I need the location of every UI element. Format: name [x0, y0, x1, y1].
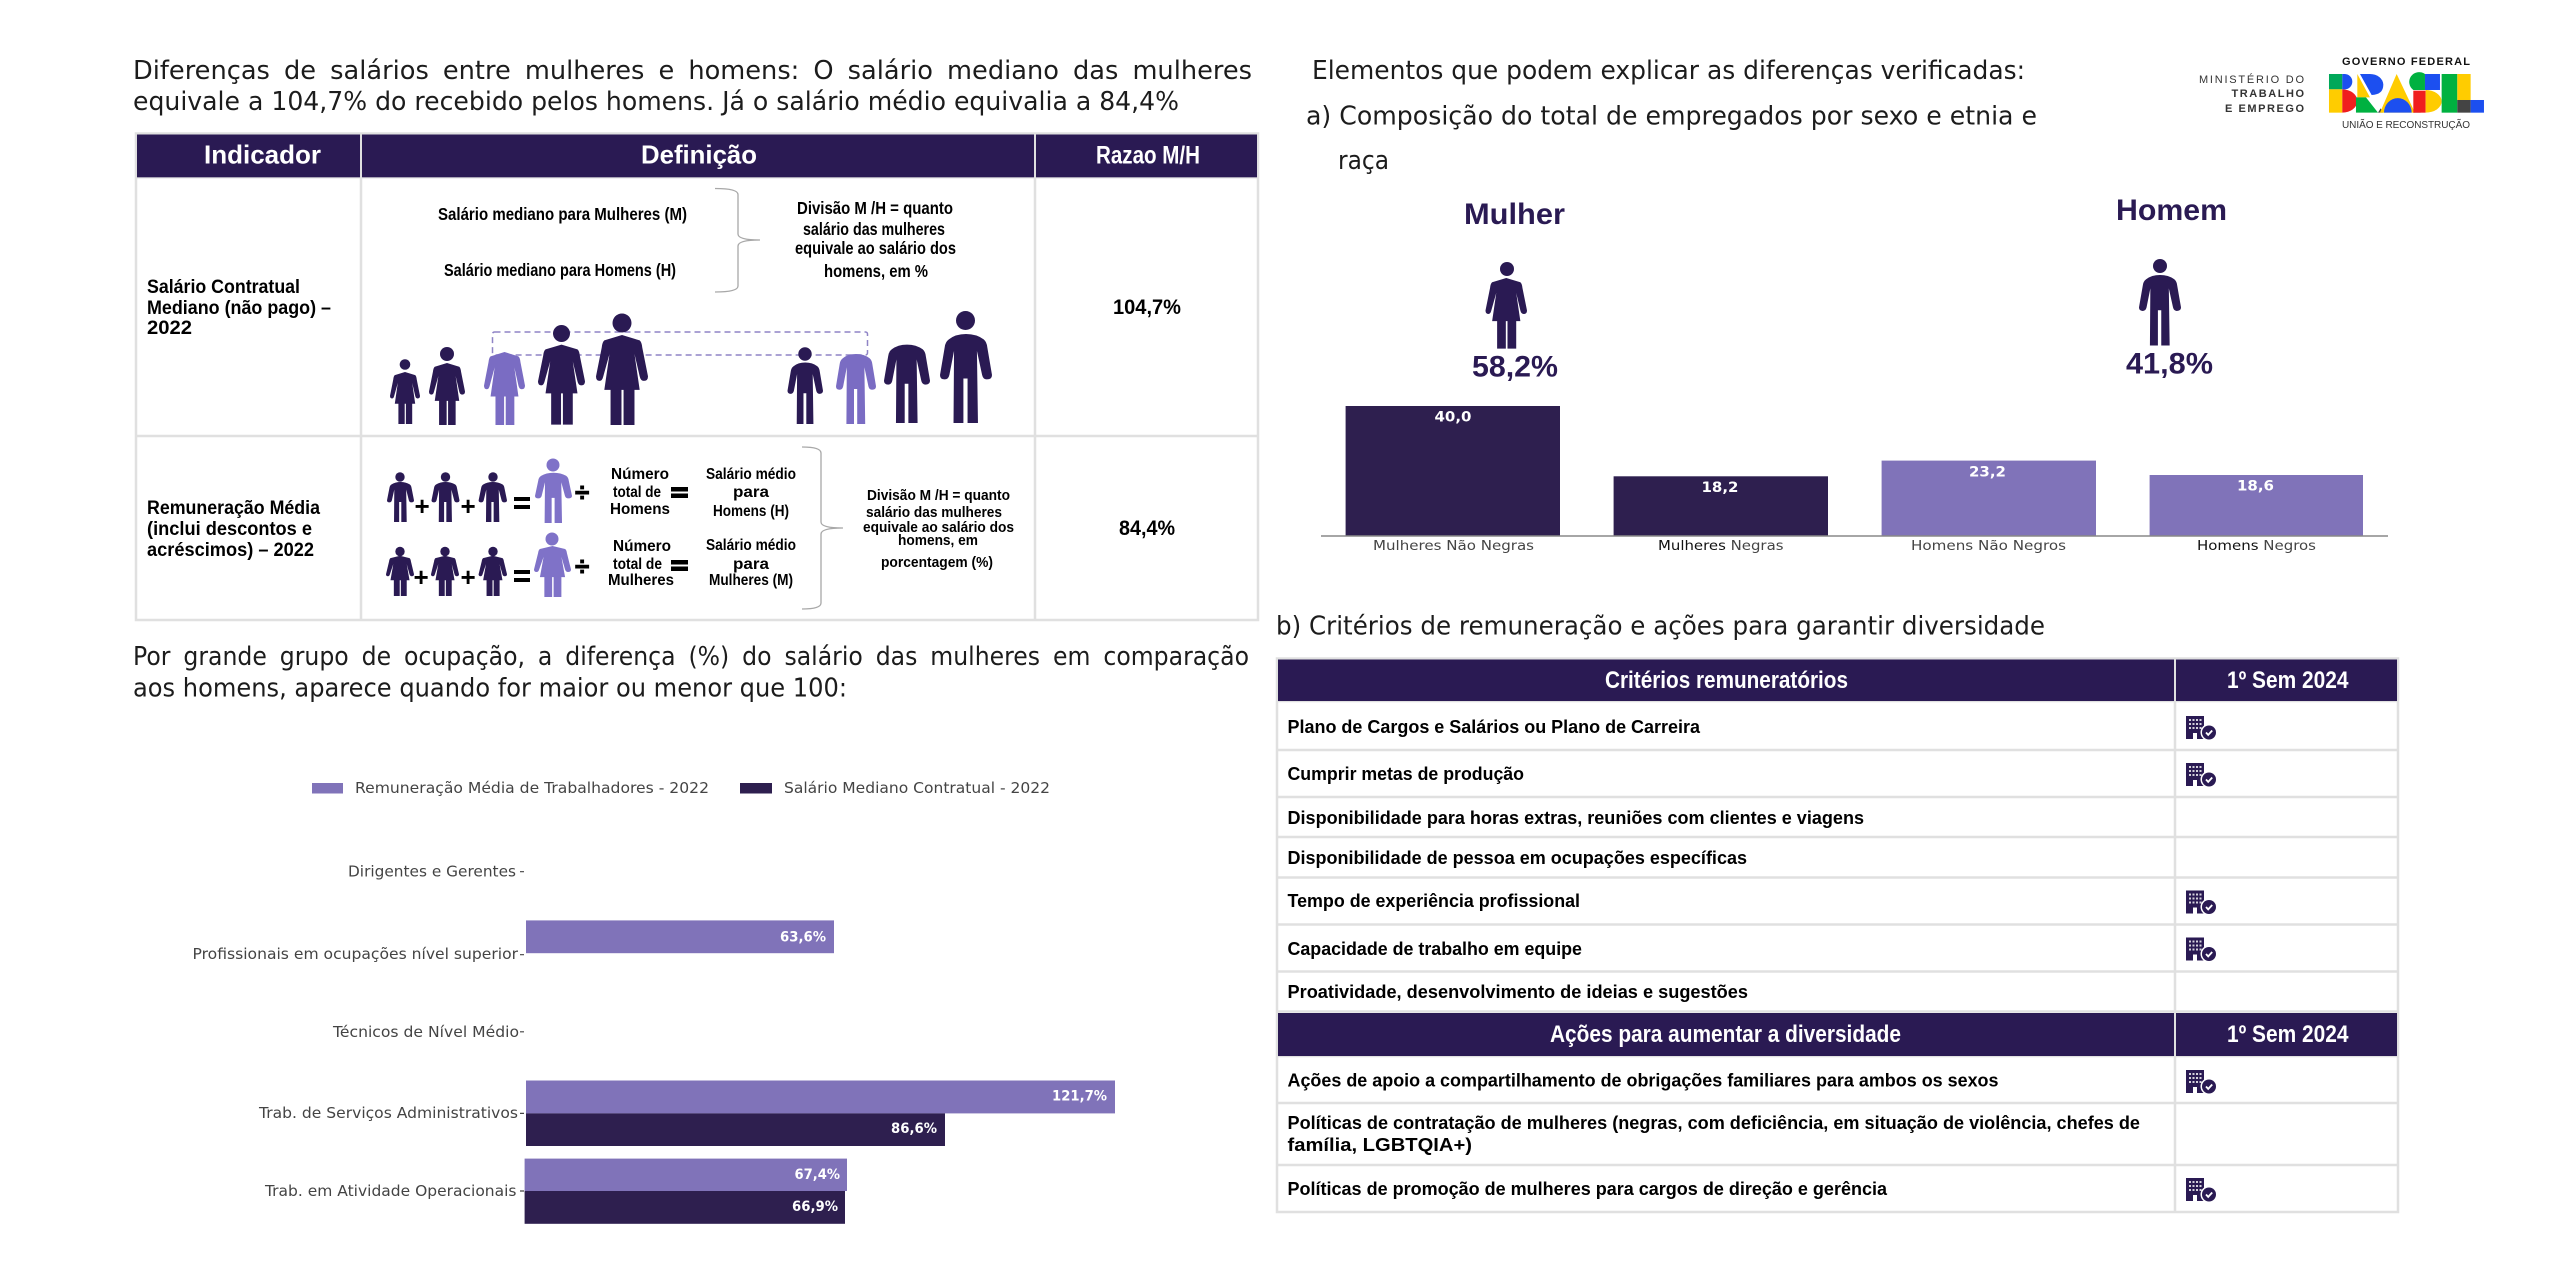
formula: average salary for women: Salário médio — [706, 537, 796, 554]
formula: average salary for women: ÷ — [575, 551, 589, 581]
category axis labels: Dirigentes e Gerentes — [348, 863, 516, 881]
formula: average salary for women: + — [460, 562, 476, 592]
table header row — [137, 134, 1257, 177]
table header row: Razao M/H — [1096, 142, 1200, 170]
text: division explanation average: homens, em — [898, 532, 978, 549]
heading: occupation groups: Por grande grupo de ocupação, a diferença (%) do salário das mulheres em comparação — [133, 642, 1249, 672]
criteria rows: Tempo de experiência profissional — [1288, 891, 1580, 911]
label: homem — [2116, 194, 2227, 380]
legend — [312, 779, 1050, 797]
formula: average salary for men: total de — [613, 484, 661, 501]
logo ministry text: MINISTÉRIO DO — [2199, 73, 2304, 86]
header: critérios remuneratórios: 1º Sem 2024 — [2227, 667, 2349, 694]
header: ações para aumentar a diversidade — [1278, 1013, 2397, 1056]
icons: women ordered by salary — [390, 314, 648, 425]
formula: average salary for men: para — [733, 484, 769, 501]
dashed median connector — [492, 332, 868, 355]
header: ações para aumentar a diversidade: 1º Sem 2024 — [2227, 1021, 2349, 1048]
bars: serviços administrativos: 121,7% — [1052, 1088, 1107, 1104]
criteria rows: Capacidade de trabalho em equipe — [1288, 939, 1582, 959]
action rows: Políticas de promoção de mulheres para cargos de direção e gerência — [1288, 1179, 1888, 1199]
heading: explaining elements: Elementos que podem explicar as diferenças verificadas: — [1312, 56, 2025, 86]
chart: horizontal bars by occupation — [192, 779, 1115, 1224]
row label: remuneração média: acréscimos) – 2022 — [147, 540, 314, 561]
icons: men ordered by salary — [788, 311, 992, 424]
title: salary differences: equivale a 104,7% do recebido pelos homens. Já o salário médio equivalia a 84,4% — [133, 87, 1179, 117]
label: homem: Homem — [2116, 194, 2227, 227]
category axis labels: Trab. de Serviços Administrativos — [258, 1104, 518, 1122]
row label: salário contratual mediano — [147, 277, 331, 339]
heading: explaining elements: a) Composição do total de empregados por sexo e etnia e — [1306, 101, 2037, 131]
formula: average salary for men: + — [414, 491, 430, 521]
heading: explaining elements — [1306, 56, 2037, 176]
bars: atividade operacional: 66,9% — [792, 1199, 838, 1215]
logo ministry text — [2199, 56, 2470, 131]
bar chart: composition: Mulheres Não Negras — [1373, 538, 1534, 554]
category axis labels: Trab. em Atividade Operacionais — [264, 1182, 517, 1200]
row label: salário contratual mediano: 2022 — [147, 318, 192, 339]
label: mulher — [1464, 198, 1565, 384]
criteria rows — [1288, 717, 1864, 1002]
heading: occupation groups — [133, 642, 1249, 704]
formula: average salary for women: para — [733, 556, 769, 573]
bar chart: composition: 23,2 — [1969, 464, 2006, 480]
criteria rows: Proatividade, desenvolvimento de ideias e sugestões — [1288, 982, 1748, 1002]
bars: serviços administrativos: 86,6% — [891, 1121, 937, 1137]
label: mulher: Mulher — [1464, 198, 1565, 231]
criteria rows: Plano de Cargos e Salários ou Plano de Carreira — [1288, 717, 1701, 737]
table grid — [136, 134, 1258, 620]
row label: salário contratual mediano: Mediano (não pago) – — [147, 298, 331, 319]
action rows: Ações de apoio a compartilhamento de obrigações familiares para ambos os sexos — [1288, 1070, 1998, 1090]
bar chart: composition: 18,6 — [2237, 479, 2274, 495]
logo ministry text: E EMPREGO — [2225, 103, 2304, 115]
panel: criteria and diversity table — [1277, 658, 2398, 1212]
brace: median salaries — [715, 188, 760, 292]
bar chart: composition: 40,0 — [1434, 410, 1472, 426]
title: salary differences: Diferenças de salários entre mulheres e homens: O salário mediano das mulheres — [133, 56, 1252, 86]
panel: indicator definition table — [136, 134, 1258, 620]
formula: average salary for men: Homens — [610, 501, 670, 518]
action rows: Políticas de contratação de mulheres (negras, com deficiência, em situação de violência, chefes de — [1288, 1113, 2140, 1133]
header: critérios remuneratórios — [1278, 660, 2397, 701]
icons: company check marks — [2186, 716, 2218, 1203]
row label: remuneração média: (inclui descontos e — [147, 519, 312, 540]
logo ministry text: GOVERNO FEDERAL — [2342, 56, 2470, 68]
bars: profissionais — [526, 920, 834, 953]
bars: atividade operacional — [525, 1159, 847, 1224]
row label: remuneração média — [147, 498, 320, 561]
formula: average salary for men: + — [460, 491, 476, 521]
bar chart: composition: Homens Não Negros — [1911, 538, 2066, 554]
label: homem: 41,8% — [2126, 348, 2213, 380]
heading: explaining elements: raça — [1338, 146, 1389, 176]
text: division explanation average — [863, 487, 1014, 571]
formula: average salary for men: Salário médio — [706, 466, 796, 483]
median salary definition labels — [438, 204, 687, 280]
formula: average salary for women: Número — [613, 538, 671, 555]
text: division explanation average: Divisão M /H = quanto — [867, 487, 1010, 504]
text: division explanation median: homens, em % — [824, 261, 928, 281]
text: division explanation median: equivale ao salário dos — [795, 238, 956, 258]
logo: Ministério do Trabalho e Governo Federal — [2199, 56, 2484, 131]
formula: average salary for men: ÷ — [575, 477, 589, 507]
brace: average salaries — [802, 447, 843, 609]
legend: Salário Mediano Contratual - 2022 — [784, 779, 1050, 797]
row label: remuneração média: Remuneração Média — [147, 498, 320, 519]
row label: salário contratual mediano: Salário Contratual — [147, 277, 300, 298]
criteria rows: Disponibilidade para horas extras, reuniões com clientes e viagens — [1288, 808, 1864, 828]
header: ações para aumentar a diversidade: Ações para aumentar a diversidade — [1550, 1021, 1901, 1048]
header: critérios remuneratórios: Critérios remuneratórios — [1605, 667, 1848, 694]
formula: average salary for men — [387, 458, 796, 523]
bars: serviços administrativos — [526, 1080, 1115, 1146]
panel: composition by sex and race — [1321, 194, 2388, 554]
legend: Remuneração Média de Trabalhadores - 2022 — [355, 779, 709, 797]
formula: average salary for men: Homens (H) — [713, 503, 789, 520]
median salary definition labels: Salário mediano para Mulheres (M) — [438, 204, 687, 224]
formula: average salary for men: Número — [611, 466, 669, 483]
category axis labels: Técnicos de Nível Médio — [332, 1023, 519, 1041]
text: division explanation average: equivale ao salário dos — [863, 519, 1014, 536]
median salary definition labels: Salário mediano para Homens (H) — [444, 260, 676, 280]
value: razão salário mediano: 104,7% — [1113, 296, 1181, 319]
formula: average salary for women — [386, 532, 796, 597]
action rows: família, LGBTQIA+) — [1288, 1135, 1472, 1155]
formula: average salary for women: Mulheres — [608, 572, 674, 589]
bar chart: composition: Mulheres Negras — [1658, 538, 1784, 554]
bar chart: composition — [1321, 406, 2388, 554]
title: salary differences — [133, 56, 1252, 117]
heading: occupation groups: aos homens, aparece quando for maior ou menor que 100: — [133, 674, 847, 704]
table header row: Definição — [641, 140, 757, 170]
text: division explanation median: salário das mulheres — [803, 219, 945, 239]
value: razão remuneração média: 84,4% — [1119, 517, 1175, 540]
category axis labels: Profissionais em ocupações nível superior — [192, 945, 519, 963]
formula: average salary for women: Mulheres (M) — [709, 572, 793, 589]
text: division explanation average: salário das mulheres — [866, 504, 1002, 521]
bar chart: composition: Homens Negros — [2197, 538, 2316, 554]
logo ministry text: UNIÃO E RECONSTRUÇÃO — [2342, 118, 2470, 131]
text: division explanation average: porcentagem (%) — [881, 554, 993, 571]
table header row: Indicador — [204, 140, 321, 170]
bars: atividade operacional: 67,4% — [794, 1167, 840, 1183]
logo ministry text: TRABALHO — [2232, 88, 2304, 100]
label: mulher: 58,2% — [1472, 350, 1558, 384]
formula: average salary for women: + — [414, 562, 429, 592]
formula: average salary for women: total de — [613, 556, 662, 573]
criteria rows: Cumprir metas de produção — [1288, 764, 1524, 784]
bars: profissionais: 63,6% — [780, 929, 826, 945]
text: division explanation median — [795, 198, 956, 281]
category axis labels — [192, 863, 524, 1200]
heading: criteria and actions: b) Critérios de remuneração e ações para garantir diversidade — [1276, 612, 2045, 642]
criteria rows: Disponibilidade de pessoa em ocupações específicas — [1288, 848, 1747, 868]
text: division explanation median: Divisão M /H = quanto — [797, 198, 953, 218]
table grid — [1277, 658, 2398, 1212]
logo BRASIL mark — [2329, 72, 2484, 113]
bar chart: composition: 18,2 — [1702, 480, 1738, 496]
action rows — [1288, 1070, 2140, 1199]
